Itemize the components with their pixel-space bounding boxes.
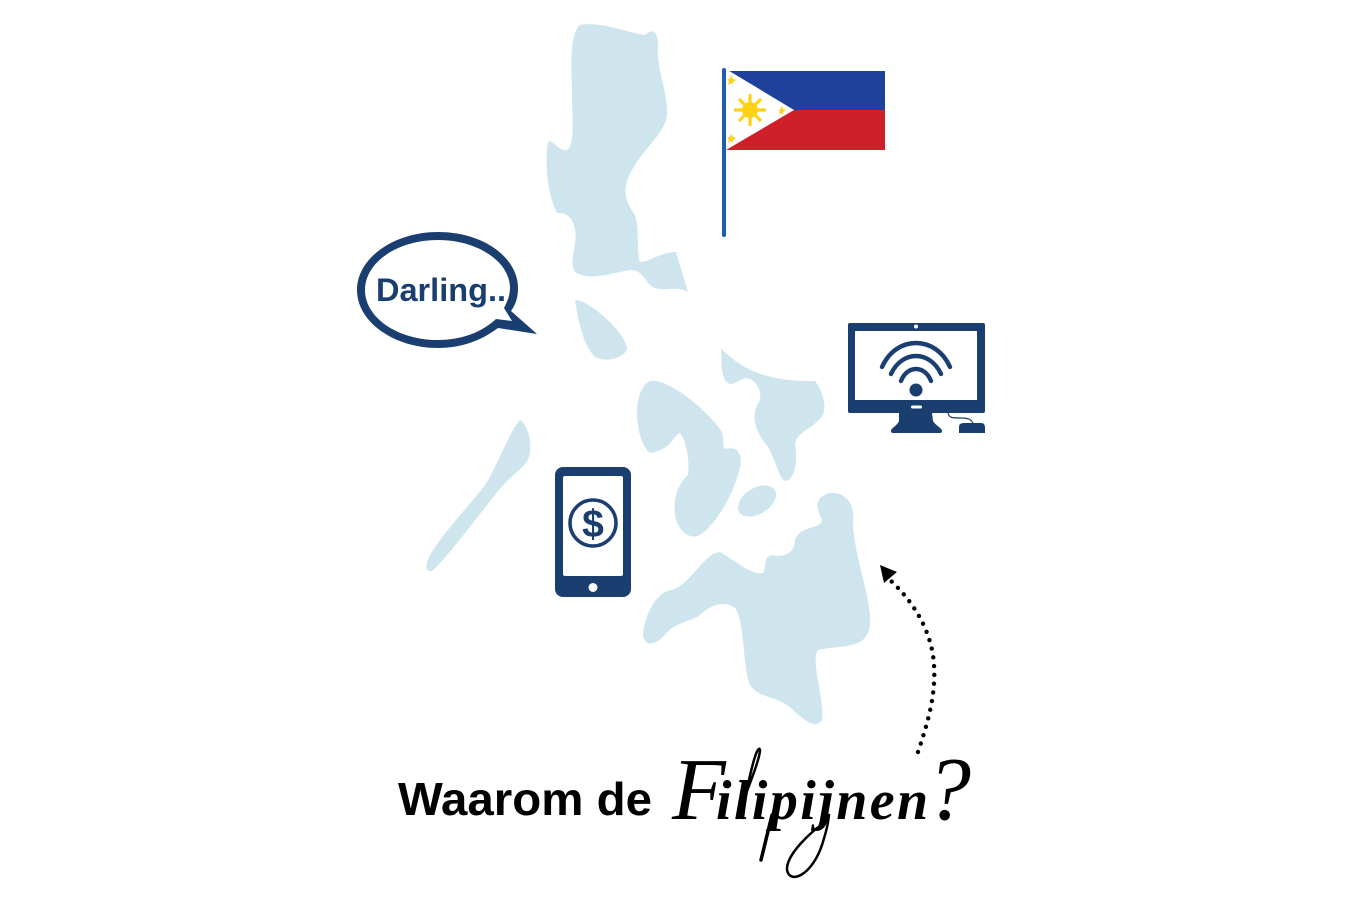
text: Darling..: Darling.. [376, 272, 506, 308]
island: Luzon [546, 24, 688, 292]
callout: speech bubble [357, 232, 537, 348]
icon: Philippine flag [722, 68, 885, 237]
map of the Philippines [426, 24, 870, 724]
island: Mindanao [643, 493, 870, 724]
icon: smartphone with dollar coin [555, 467, 631, 597]
icon: wifi signal [882, 343, 950, 396]
island: Mindoro [575, 300, 627, 360]
decorative script flourishes [737, 749, 829, 877]
text: Filipijnen?: F [671, 742, 727, 839]
island: Panay and Negros [637, 381, 741, 537]
text: Waarom de: Waarom de [398, 773, 652, 825]
icon: desktop monitor with wifi and mouse [848, 323, 985, 433]
text: dollar sign: $ [582, 503, 604, 546]
island: Palawan [426, 420, 530, 571]
island: Bohol [732, 479, 782, 523]
text: Filipijnen?: ilipijnen [716, 770, 931, 832]
island: Samar and Leyte [721, 348, 824, 481]
arrow: dotted curve pointing to Mindanao [880, 565, 934, 752]
title [398, 740, 971, 877]
text: Filipijnen?: ? [926, 740, 971, 839]
